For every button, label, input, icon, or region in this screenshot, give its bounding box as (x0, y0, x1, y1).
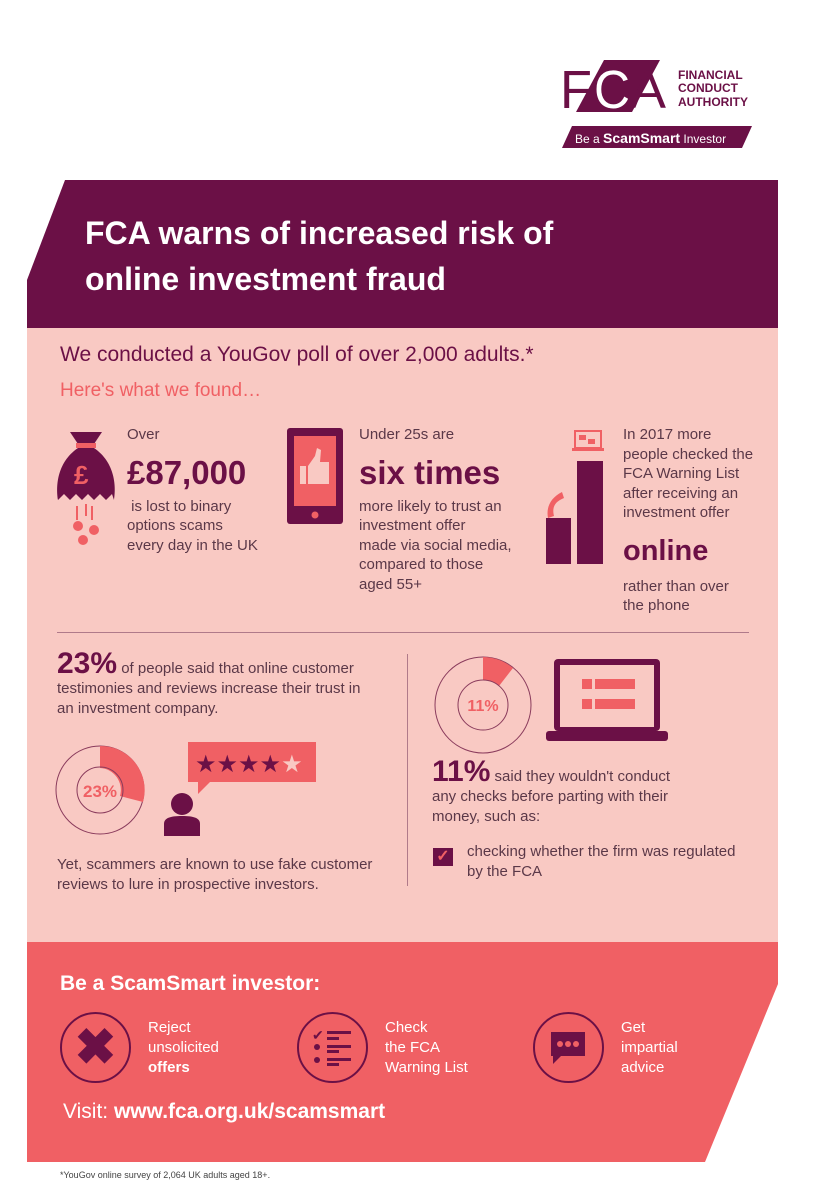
icon: bar chart phone laptop (546, 430, 604, 564)
stat: online: the phone (623, 597, 690, 614)
icon: laptop (546, 659, 668, 741)
stat: online: In 2017 more (623, 426, 711, 443)
stat: 23%: 23% of people said that online customer (57, 647, 354, 680)
stat: online: after receiving an (623, 484, 738, 502)
logo: F (560, 60, 592, 120)
header band (27, 180, 778, 328)
tip: advice: impartial (621, 1039, 678, 1056)
donut chart 23% (56, 746, 145, 834)
stat: 87000: options scams (127, 517, 223, 534)
logo: FINANCIAL (678, 68, 743, 82)
stat: online: rather than over (623, 578, 729, 594)
stat: six times (359, 426, 512, 592)
title: FCA warns of increased risk of (85, 215, 553, 251)
text: fake reviews: Yet, scammers are known to use fake customer (57, 856, 372, 873)
text: fake reviews: reviews to lure in prospective investors. (57, 876, 319, 892)
logo: C (594, 60, 630, 120)
stat: six times: aged 55+ (359, 576, 422, 592)
icon: money bag: £ (74, 460, 89, 490)
footnote: *YouGov online survey of 2,064 UK adults aged 18+. (60, 1170, 270, 1180)
subheading: Here's what we found… (60, 380, 261, 401)
stat: six times: investment offer (359, 517, 465, 534)
title (86, 220, 554, 290)
stat: online: investment offer (623, 504, 729, 521)
text: checking regulated (467, 843, 735, 880)
text: checking regulated: by the FCA (467, 862, 542, 880)
tip: advice: advice (621, 1059, 664, 1076)
donut chart 11% (434, 656, 532, 754)
stat: online: online (623, 534, 708, 566)
donut chart 11%: 11% (467, 698, 499, 715)
tip: reject (60, 1012, 218, 1083)
stat: six times: compared to those (359, 556, 483, 573)
icon: phone thumbs up (287, 428, 343, 524)
text: fake reviews (57, 856, 372, 892)
icon: checkbox (433, 848, 453, 866)
logo: A (630, 60, 666, 120)
logo: CONDUCT (678, 81, 739, 95)
tip: reject: unsolicited (148, 1039, 219, 1056)
coral panel (27, 942, 778, 1162)
icon: checkbox: ✓ (436, 848, 450, 865)
tip: reject: Reject (148, 1019, 191, 1036)
tip: reject: ✖ (75, 1019, 116, 1075)
stat: six times: more likely to trust an (359, 498, 502, 514)
tip: check: Check (385, 1019, 428, 1036)
donut chart 23%: 23% (83, 782, 117, 801)
tip: reject: offers (148, 1059, 190, 1076)
heading: Be a ScamSmart investor: (60, 972, 320, 995)
tip: check: Warning List (385, 1059, 468, 1076)
icon: reviewer with stars (164, 742, 316, 836)
icon: money bag (57, 432, 115, 545)
stat: six times: made via social media, (359, 536, 512, 554)
stat: 87000: Over (127, 426, 160, 443)
stat: online: people checked the (623, 446, 753, 462)
stat: 23% (57, 647, 360, 717)
stat: online (623, 426, 753, 614)
stat: 87000: £87,000 (127, 454, 246, 490)
tip: check: ✔ (312, 1027, 324, 1043)
logo: AUTHORITY (678, 95, 748, 109)
pink panel (27, 328, 778, 942)
stat: 11%: any checks before parting with their (432, 788, 668, 805)
stat: six times: six times (359, 454, 500, 490)
text: checking regulated: checking whether the firm was regulated (467, 843, 735, 860)
tip: advice: Get (621, 1019, 645, 1036)
stat: six times: Under 25s are (359, 426, 454, 443)
tip: check (297, 1012, 468, 1083)
tip: advice (533, 1012, 677, 1083)
stat: 11%: 11% said they wouldn't conduct (432, 755, 670, 788)
logo (560, 60, 752, 148)
stat: 87000 (127, 426, 258, 554)
visit url: Visit: www.fca.org.uk/scamsmart (63, 1100, 385, 1123)
stat: online: FCA Warning List (623, 465, 739, 482)
poll heading: We conducted a YouGov poll of over 2,000 adults.* (60, 343, 534, 366)
stat: 11% (432, 755, 670, 825)
stat: 87000: is lost to binary (131, 498, 231, 514)
title: online investment fraud (85, 261, 446, 297)
stat: 23%: testimonies and reviews increase their trust in (57, 680, 360, 697)
tip: check: the FCA (385, 1039, 440, 1056)
stat: 87000: every day in the UK (127, 536, 258, 554)
stat: 11%: money, such as: (432, 808, 540, 825)
stat: 23%: an investment company. (57, 700, 218, 717)
icon: reviewer with stars: ★★★★★ (195, 751, 303, 778)
logo: Be a ScamSmart Investor (575, 130, 726, 146)
